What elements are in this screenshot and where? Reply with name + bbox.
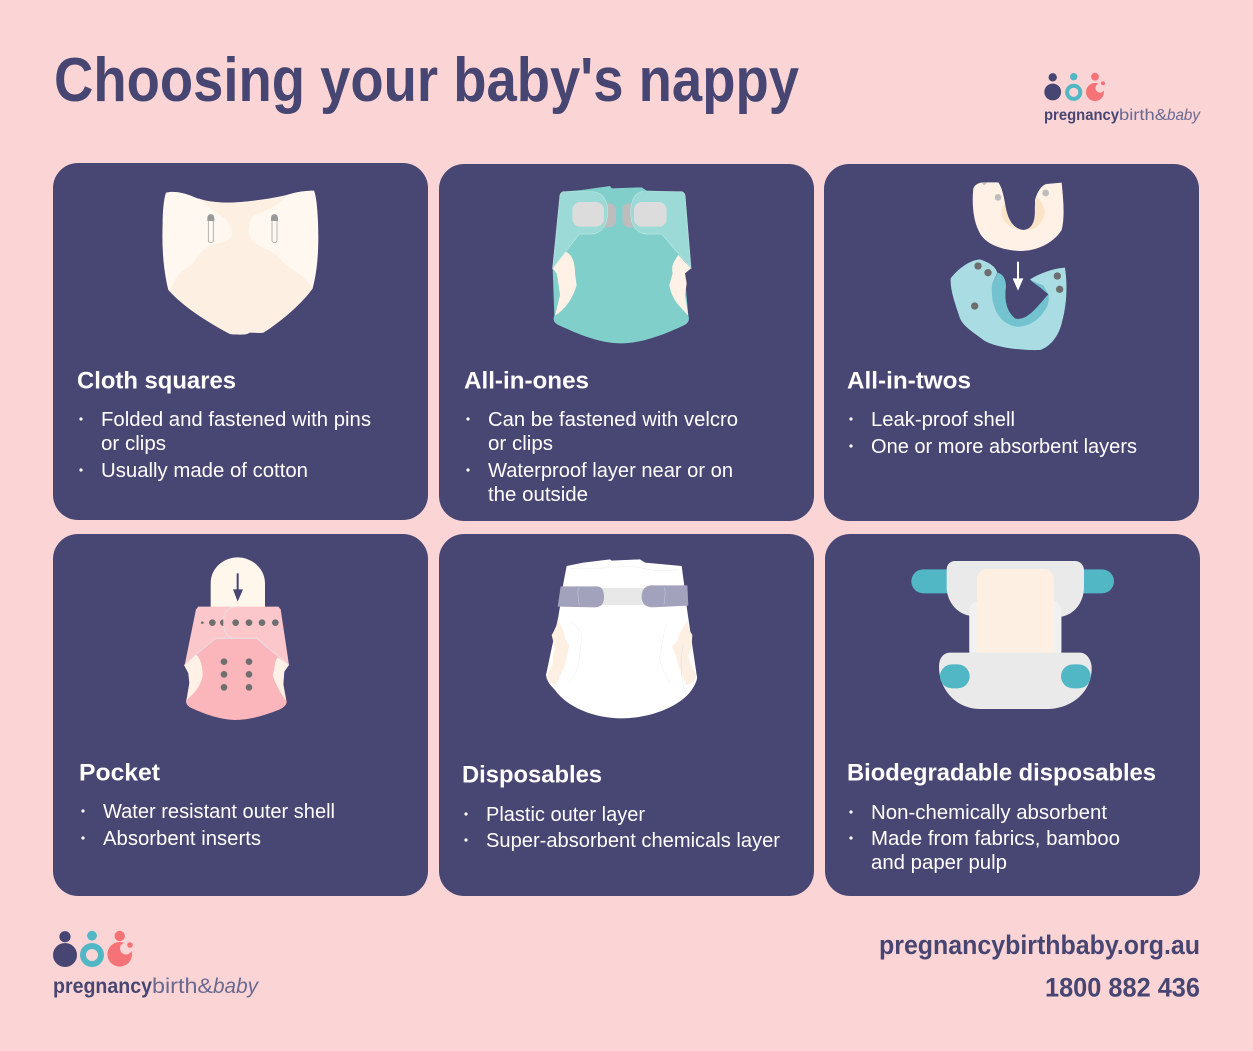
list: disposables: Plastic outer layer <box>486 804 645 826</box>
contact: website: pregnancybirthbaby.org.au <box>879 930 1200 960</box>
list: all-in-ones <box>466 409 738 506</box>
list: all-in-twos: Leak-proof shell <box>871 409 1015 431</box>
list: pocket: Water resistant outer shell <box>103 801 335 823</box>
list: biodegradable disposables: Non-chemically absorbent <box>871 802 1107 824</box>
list: cloth squares: or clips <box>101 433 166 455</box>
icon: pocket nappy <box>184 557 289 720</box>
icon: disposable nappy <box>546 559 697 718</box>
list: all-in-ones: Waterproof layer near or on <box>488 460 733 482</box>
icon: biodegradable nappy <box>911 561 1114 709</box>
list: pocket: Absorbent inserts <box>103 828 261 850</box>
icon: cloth square nappy <box>162 191 318 335</box>
logo: bottom left: pregnancy <box>53 975 152 998</box>
heading: cloth squares: Cloth squares <box>77 368 236 394</box>
logo: bottom left: birth& <box>152 975 213 998</box>
panel: disposables <box>439 534 814 896</box>
logo: top right: baby <box>1167 107 1201 124</box>
heading: all-in-twos: All-in-twos <box>847 368 971 394</box>
panel: cloth squares <box>53 163 428 520</box>
list: all-in-ones: the outside <box>488 484 588 506</box>
list: biodegradable disposables <box>849 802 1120 874</box>
heading: all-in-ones: All-in-ones <box>464 368 589 394</box>
panel: pocket <box>53 534 428 896</box>
title: Choosing your baby's nappy <box>54 46 799 115</box>
list: disposables <box>464 804 780 852</box>
logo: bottom left: baby <box>213 975 259 998</box>
panel: all-in-twos <box>824 164 1199 521</box>
list: pocket <box>81 801 335 850</box>
panel: biodegradable disposables <box>825 534 1200 896</box>
panel: all-in-ones <box>439 164 814 521</box>
list: all-in-twos: One or more absorbent layers <box>871 436 1137 458</box>
logo: top right: birth& <box>1119 107 1167 124</box>
icon: all-in-one nappy <box>553 186 691 343</box>
icon: all-in-two nappy <box>951 182 1066 350</box>
list: disposables: Super-absorbent chemicals layer <box>486 830 780 852</box>
heading: biodegradable disposables: Biodegradable disposables <box>847 760 1156 786</box>
logo: bottom left <box>53 931 259 998</box>
heading: pocket: Pocket <box>79 760 160 786</box>
list: biodegradable disposables: Made from fabrics, bamboo <box>871 828 1120 850</box>
list: all-in-ones: Can be fastened with velcro <box>488 409 738 431</box>
list: biodegradable disposables: and paper pulp <box>871 852 1007 874</box>
list: cloth squares: Folded and fastened with pins <box>101 409 371 431</box>
logo: top right <box>1044 73 1201 124</box>
logo: top right: pregnancy <box>1044 107 1119 124</box>
contact: phone: 1800 882 436 <box>1045 973 1200 1003</box>
heading: disposables: Disposables <box>462 762 602 788</box>
list: cloth squares: Usually made of cotton <box>101 460 308 482</box>
list: all-in-twos <box>849 409 1137 458</box>
list: all-in-ones: or clips <box>488 433 553 455</box>
list: cloth squares <box>79 409 371 482</box>
